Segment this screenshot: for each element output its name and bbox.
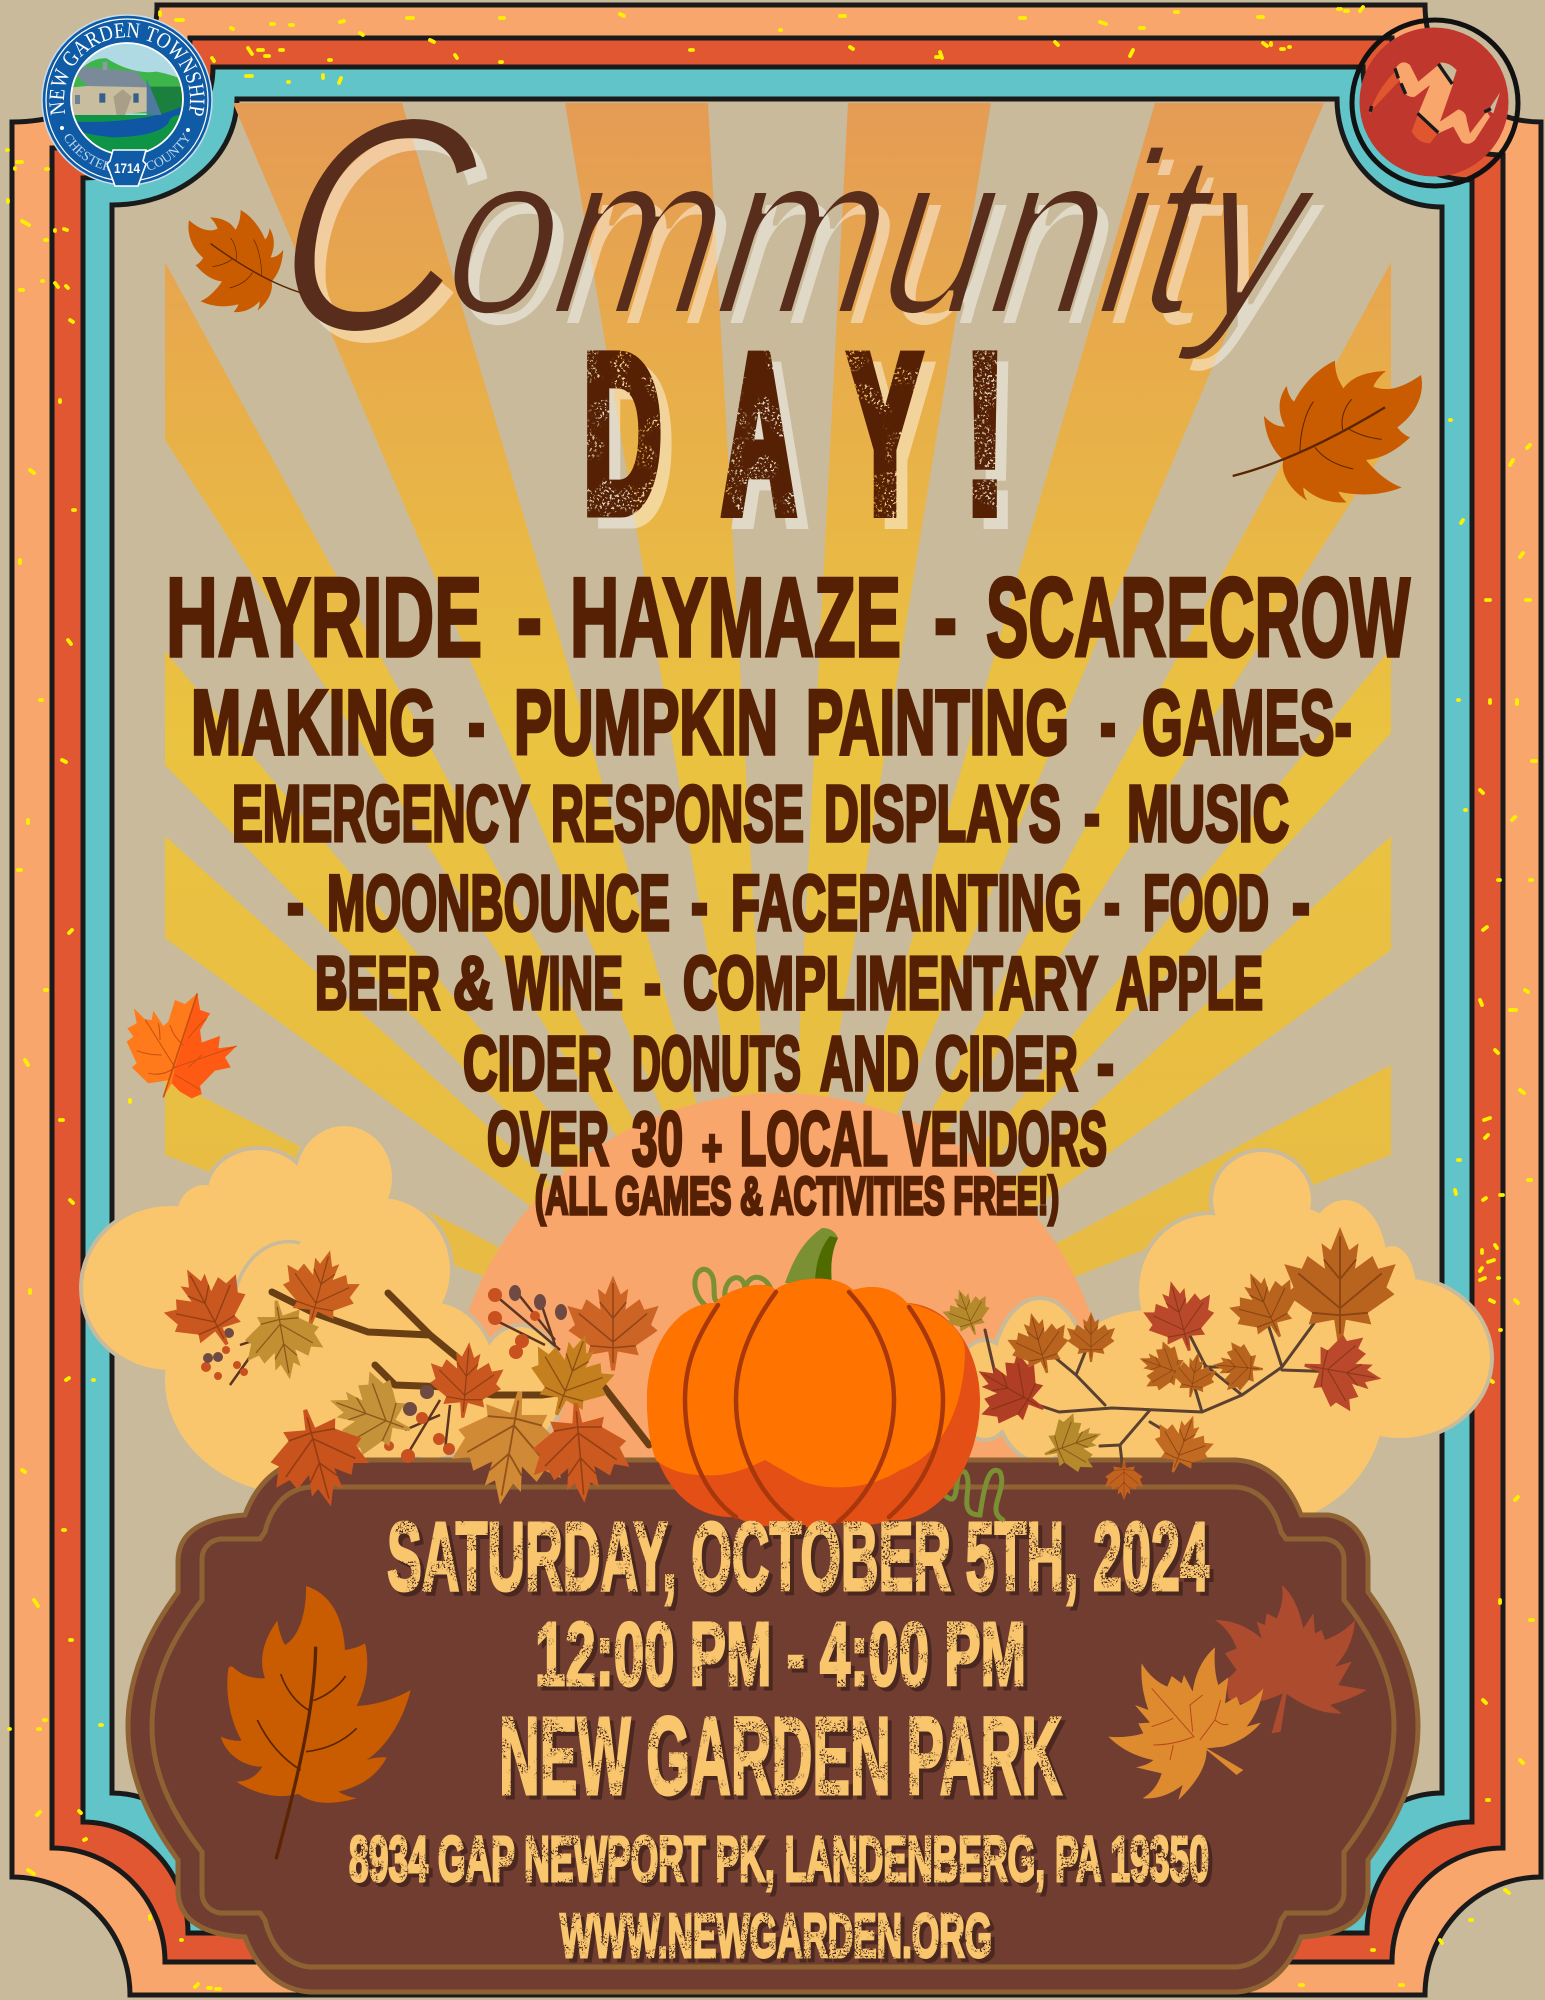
activities list: - xyxy=(517,555,542,680)
activities list: - xyxy=(934,555,957,680)
activities list: - xyxy=(644,941,661,1025)
activities list: - xyxy=(1100,672,1116,774)
plaque text xyxy=(349,1502,1209,1971)
activities list: FOOD xyxy=(1143,858,1269,947)
icon: two maple leaves on plaque xyxy=(1108,1585,1367,1800)
activities list: FACEPAINTING xyxy=(731,858,1082,947)
date and location plaque xyxy=(128,1460,1418,1992)
icon: large orange leaf on plaque xyxy=(221,1586,411,1859)
activities list: MUSIC xyxy=(1127,769,1289,858)
activities list: & xyxy=(453,941,493,1025)
title: DAY! xyxy=(583,305,1008,564)
plaque text: 12:00 PM - 4:00 PM xyxy=(535,1605,1026,1705)
activities list: - xyxy=(468,672,485,774)
activities list: MOONBOUNCE xyxy=(327,858,670,947)
title: DAY!: Y xyxy=(850,311,920,557)
icon: leaf top left xyxy=(188,210,302,312)
activities list: - xyxy=(691,858,708,947)
logo: New Garden Township seal xyxy=(41,14,213,187)
activities list: HAYMAZE xyxy=(570,555,901,680)
logo: New Garden Township seal: NEW GARDEN TOWNSHIP xyxy=(49,22,205,116)
title: DAY!: A xyxy=(723,311,795,557)
activities list: DONUTS xyxy=(632,1021,801,1107)
pumpkin xyxy=(647,1228,1003,1527)
left autumn branch xyxy=(151,1241,659,1519)
right cloud xyxy=(955,1152,1490,1525)
logo: New Garden Township seal: CHESTER xyxy=(64,134,109,172)
activities list: COMPLIMENTARY xyxy=(683,941,1097,1025)
plaque text: WWW.NEWGARDEN.ORG xyxy=(560,1902,992,1971)
activities list: PAINTING xyxy=(806,672,1069,774)
activities list: - xyxy=(1097,1021,1114,1107)
left cloud xyxy=(83,1126,562,1495)
activities list: WINE xyxy=(506,941,623,1025)
activities list: (ALL GAMES & ACTIVITIES FREE!) xyxy=(535,1167,1059,1226)
activities list: GAMES- xyxy=(1142,672,1352,774)
logo: New Garden Township seal: 1714 xyxy=(114,161,140,176)
activities list: EMERGENCY xyxy=(232,769,530,858)
activities list: BEER xyxy=(315,941,440,1025)
activities list: - xyxy=(1104,858,1120,947)
activities list: CIDER xyxy=(463,1021,612,1107)
sun xyxy=(449,1093,1109,1753)
icon: leaf top right xyxy=(1233,361,1422,502)
activities list: + xyxy=(702,1120,722,1176)
activities list: MAKING xyxy=(191,672,436,774)
activities list: - xyxy=(1084,769,1100,858)
icon: bright orange maple leaf xyxy=(127,993,237,1098)
activities list: - xyxy=(1292,858,1310,947)
right autumn branch xyxy=(937,1227,1396,1500)
activities list: AND xyxy=(820,1021,919,1107)
title: DAY!: ! xyxy=(962,305,1008,564)
activities list: - xyxy=(287,858,304,947)
activities list: APPLE xyxy=(1116,941,1263,1025)
title: Community: C xyxy=(258,55,497,395)
activities list xyxy=(166,555,1410,1226)
activities list: LOCAL xyxy=(740,1097,887,1182)
activities list: RESPONSE xyxy=(551,769,804,858)
logo: red circle MW mark xyxy=(1352,20,1518,186)
sunburst rays xyxy=(165,103,1391,1390)
title: Community xyxy=(258,55,1338,395)
title: DAY!: D xyxy=(583,309,662,559)
activities list: CIDER xyxy=(935,1021,1078,1107)
activities list: PUMPKIN xyxy=(514,672,778,774)
logo: New Garden Township seal: COUNTY xyxy=(146,132,190,170)
activities list: VENDORS xyxy=(903,1097,1107,1182)
activities list: HAYRIDE xyxy=(166,555,482,680)
activities list: 30 xyxy=(632,1097,683,1182)
activities list: OVER xyxy=(487,1097,609,1182)
title: Community: ommunity xyxy=(433,104,1331,362)
activities list: DISPLAYS xyxy=(824,769,1061,858)
